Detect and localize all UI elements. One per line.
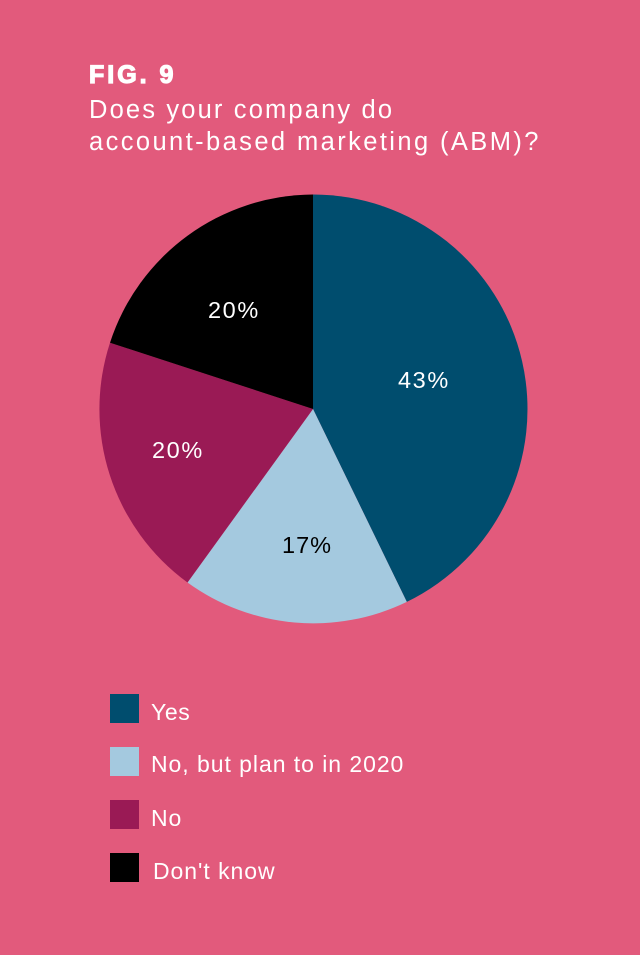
heading: question — [89, 96, 541, 156]
heading: figure number: FIG. 9 — [89, 61, 176, 89]
legend label: no but plan: No, but plan to in 2020 — [151, 751, 404, 777]
heading: question: account-based marketing (ABM)? — [89, 128, 541, 156]
legend label: yes: Yes — [151, 699, 190, 725]
legend swatch: no — [110, 800, 139, 829]
legend swatch: no but plan — [110, 747, 139, 776]
slice: no but plan 17% — [188, 409, 407, 623]
legend — [110, 694, 404, 884]
label: 43%: 43% — [398, 367, 450, 393]
heading: question: Does your company do — [89, 96, 394, 124]
label: 17%: 17% — [282, 532, 332, 558]
legend label: no: No — [151, 805, 182, 831]
label: 20% don't know: 20% — [208, 297, 260, 323]
legend label: don't know: Don't know — [153, 858, 276, 884]
label: 20% no: 20% — [152, 437, 204, 463]
slice: no 20% — [99, 343, 313, 582]
slice: yes 43% — [313, 194, 527, 602]
slice: don't know 20% — [110, 194, 313, 409]
legend swatch: yes — [110, 694, 139, 723]
legend swatch: don't know — [110, 853, 139, 882]
